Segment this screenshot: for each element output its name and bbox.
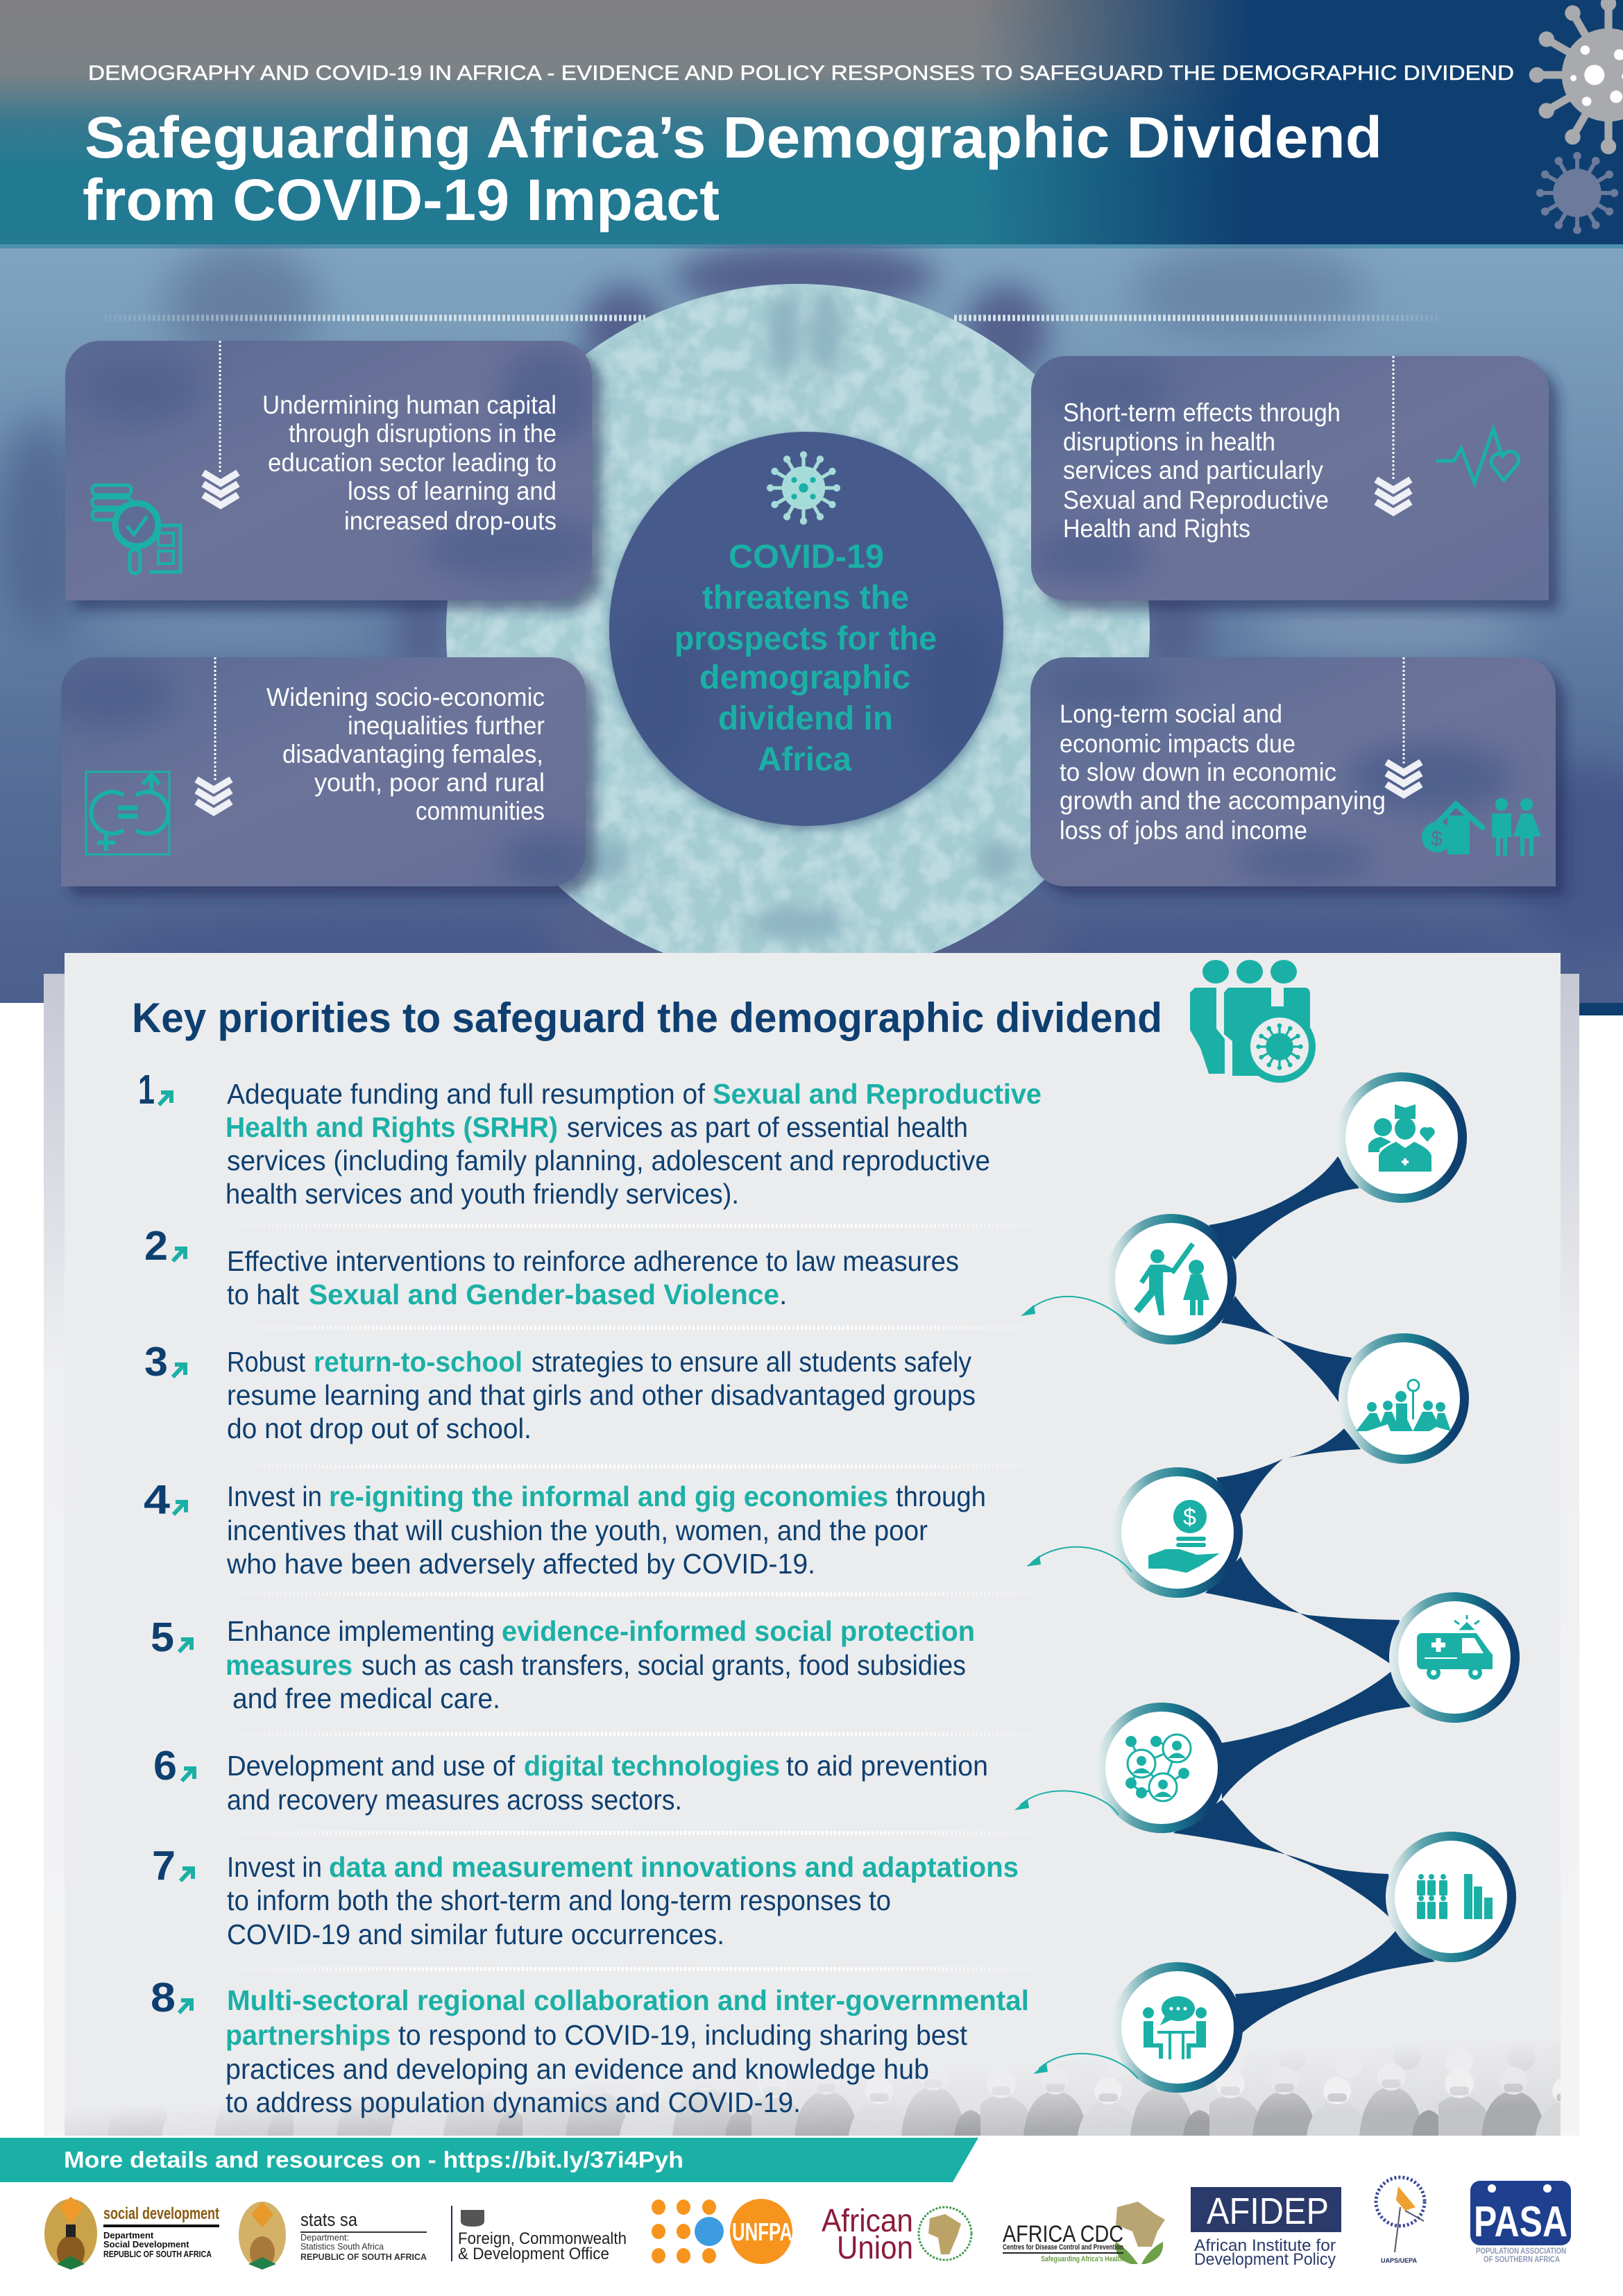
text: short-term effects: Health and Rights — [1063, 514, 1250, 543]
center statement: COVID-19 — [729, 539, 884, 575]
priority 8: to respond to COVID-19, including sharing best — [398, 2019, 968, 2051]
priority 3: return-to-school — [314, 1346, 522, 1378]
priority 2 — [144, 1223, 959, 1310]
logo: social development: REPUBLIC OF SOUTH AFRICA — [103, 2249, 212, 2259]
priority 5: Enhance implementing — [227, 1615, 495, 1647]
icon: people and virus — [1190, 960, 1316, 1083]
text: inequalities: youth, poor and rural — [314, 768, 545, 797]
text: human capital: loss of learning and — [348, 477, 556, 505]
icon: gender equality — [86, 772, 169, 854]
logo: stats sa: REPUBLIC OF SOUTH AFRICA — [300, 2252, 427, 2262]
node: health workers — [1336, 1072, 1467, 1203]
priority 6: Development and use of — [227, 1750, 516, 1782]
connector ribbon — [1173, 1156, 1435, 2033]
logo: PASA: OF SOUTHERN AFRICA — [1484, 2254, 1560, 2264]
priority 1: Health and Rights (SRHR) — [226, 1111, 558, 1143]
priority 1 — [138, 1067, 1042, 1210]
center statement — [674, 539, 937, 778]
icon: house, money and family: $ — [1431, 827, 1443, 850]
logo: FCDO: Foreign, Commonwealth — [458, 2229, 627, 2248]
heading: Key priorities to safeguard the demographic dividend — [132, 995, 1162, 1041]
main title: from COVID-19 Impact — [83, 167, 720, 233]
priority 8: 8 — [151, 1975, 176, 2020]
priority 5 — [151, 1614, 975, 1714]
text: short-term effects: Short-term effects through — [1063, 398, 1341, 427]
node: gender violence — [1106, 1214, 1237, 1344]
text: human capital: Undermining human capital — [262, 391, 556, 419]
panel backing sheet — [44, 974, 1579, 2136]
header subtitle: DEMOGRAPHY AND COVID-19 IN AFRICA - EVIDENCE AND POLICY RESPONSES TO SAFEGUARD THE DEMOGRAPHIC DIVIDEND — [88, 62, 1514, 85]
node: cash in hand: $ — [1183, 1504, 1196, 1530]
dark virus silhouette around the circle — [397, 243, 1207, 979]
node: digital network — [1096, 1703, 1227, 1833]
text: human capital: through disruptions in the — [289, 419, 556, 448]
priority 7 — [152, 1843, 1019, 1950]
priority 3: do not drop out of school. — [227, 1412, 532, 1444]
node: ambulance — [1389, 1592, 1520, 1723]
priority 2: Sexual and Gender-based Violence — [309, 1278, 779, 1310]
text: long-term impacts: growth and the accompanying — [1060, 786, 1386, 815]
logo: Africa CDC: Safeguarding Africa’s Health — [1041, 2255, 1123, 2263]
center statement: demographic — [699, 659, 910, 696]
priority 1: Sexual and Reproductive — [713, 1078, 1042, 1110]
panel: key priorities — [65, 953, 1561, 2136]
dotted rule — [104, 315, 1440, 321]
priority 3 — [144, 1339, 976, 1444]
panel: long-term impacts — [1030, 657, 1556, 886]
priority 2: . — [779, 1278, 787, 1310]
separators — [201, 1226, 1062, 1969]
logo: Africa CDC: AFRICA CDC — [1003, 2221, 1123, 2247]
priority 4: 4 — [144, 1477, 170, 1523]
text: inequalities — [266, 683, 545, 825]
navy corner strip — [1579, 1003, 1623, 1015]
priority 6: and recovery measures across sectors. — [227, 1784, 682, 1816]
center statement: prospects for the — [674, 621, 937, 657]
priority 2: Effective interventions to reinforce adherence to law measures — [227, 1245, 959, 1277]
text: inequalities: communities — [416, 797, 545, 825]
priority 1: Adequate funding and full resumption of — [227, 1078, 706, 1110]
arrow: node 2 — [1021, 1297, 1127, 1322]
header band — [0, 0, 1623, 244]
logo: AFIDEP: AFIDEP — [1207, 2191, 1329, 2232]
arrow: node 4 — [1026, 1547, 1132, 1572]
logo: African Union: Union — [837, 2229, 913, 2265]
text: inequalities: Widening socio-economic — [266, 683, 545, 711]
hero background — [0, 243, 1623, 1003]
priority 4: Invest in — [227, 1480, 322, 1512]
priority 6 — [153, 1743, 988, 1816]
main title — [83, 105, 1382, 233]
priority 2: 2 — [144, 1223, 168, 1269]
text: short-term effects: Sexual and Reproductive — [1063, 486, 1329, 514]
logo: Africa CDC — [1003, 2202, 1165, 2264]
priority 4 — [144, 1477, 986, 1580]
priority 3: 3 — [144, 1339, 168, 1385]
icon: books and magnifier — [92, 485, 180, 573]
priority 7: Invest in — [227, 1851, 322, 1883]
priority 3: strategies to ensure all students safely — [532, 1346, 971, 1378]
priority 7: to inform both the short-term and long-term responses to — [227, 1884, 891, 1916]
logo: social development: Department — [103, 2230, 154, 2240]
priority 2: to halt — [227, 1278, 300, 1310]
logo: stats sa — [239, 2202, 427, 2270]
icon: large virus — [1529, 0, 1623, 154]
text: short-term effects — [1063, 398, 1341, 543]
big pale circle — [446, 284, 1150, 979]
logo: social development: social development — [103, 2204, 219, 2223]
logo: African Union — [822, 2202, 971, 2265]
text: long-term impacts — [1060, 700, 1386, 845]
priority 3: resume learning and that girls and other disadvantaged groups — [227, 1379, 976, 1411]
priority 8: partnerships — [226, 2019, 391, 2051]
logo: AFIDEP: Development Policy — [1194, 2250, 1336, 2269]
text: human capital — [262, 391, 556, 535]
logo: stats sa: stats sa — [300, 2209, 358, 2230]
center statement: dividend in — [718, 700, 893, 737]
text: inequalities: inequalities further — [348, 711, 545, 740]
logo: social development — [44, 2197, 219, 2270]
priority 5: measures — [226, 1649, 352, 1681]
center circle — [609, 432, 1003, 826]
node: regional collaboration — [1112, 1962, 1243, 2093]
panel: inequalities — [49, 657, 597, 888]
main title: Safeguarding Africa’s Demographic Dividend — [85, 105, 1382, 170]
text: short-term effects: services and particularly — [1063, 456, 1323, 484]
priority 4: who have been adversely affected by COVID-19. — [226, 1548, 815, 1580]
text: long-term impacts: to slow down in economic — [1060, 758, 1336, 786]
logo: PASA: POPULATION ASSOCIATION — [1476, 2246, 1566, 2256]
priority 1: health services and youth friendly services). — [226, 1178, 739, 1210]
logo: stats sa: Statistics South Africa — [300, 2241, 384, 2252]
center statement: threatens the — [702, 580, 909, 616]
node: data and measurement — [1386, 1832, 1516, 1962]
priority 5: and free medical care. — [232, 1682, 500, 1714]
logo: PASA: PASA — [1474, 2198, 1567, 2246]
icon: house, money and family — [1422, 798, 1541, 856]
priority 6: digital technologies — [524, 1750, 780, 1782]
logo: social development: Social Development — [103, 2239, 189, 2249]
text: human capital: education sector leading to — [268, 448, 556, 477]
priority 4: incentives that will cushion the youth, women, and the poor — [227, 1514, 928, 1546]
text: human capital: increased drop-outs — [344, 507, 556, 535]
priority 8 — [151, 1975, 1029, 2118]
panel: human capital — [65, 341, 604, 600]
logo: PASA — [1470, 2181, 1571, 2264]
priority 7: data and measurement innovations and adaptations — [329, 1851, 1019, 1883]
arrow: node 8 — [1033, 2054, 1138, 2079]
logo: stats sa: Department: — [300, 2232, 349, 2243]
text: long-term impacts: economic impacts due — [1060, 729, 1295, 758]
priority 5: evidence-informed social protection — [502, 1615, 975, 1647]
priority 8: to address population dynamics and COVID-19. — [226, 2086, 801, 2118]
priority 4: through — [896, 1480, 986, 1512]
node: cash in hand — [1112, 1467, 1243, 1598]
priority 8: practices and developing an evidence and knowledge hub — [226, 2053, 929, 2085]
text: long-term impacts: loss of jobs and income — [1060, 816, 1307, 845]
icon: virus — [767, 451, 840, 525]
priority 7: COVID-19 and similar future occurrences. — [227, 1918, 724, 1950]
priority 4: re-igniting the informal and gig economies — [329, 1480, 888, 1512]
priority 3: Robust — [227, 1346, 306, 1378]
crowd illustration — [65, 2052, 1561, 2136]
icon: heartbeat — [1436, 429, 1519, 483]
priority 6: 6 — [153, 1743, 177, 1789]
footer bar: More details and resources on - https://bit.ly/37i4Pyh — [64, 2147, 683, 2172]
arrow: node 6 — [1014, 1791, 1119, 1815]
priority 6: to aid prevention — [786, 1750, 988, 1782]
text: short-term effects: disruptions in health — [1063, 428, 1275, 456]
logo: AFIDEP: African Institute for — [1194, 2236, 1336, 2255]
center statement: Africa — [758, 741, 851, 778]
logo: UNFPA — [652, 2199, 792, 2264]
text: long-term impacts: Long-term social and — [1060, 700, 1282, 728]
text: inequalities: disadvantaging females, — [282, 740, 543, 768]
panel: short-term effects — [1027, 356, 1549, 600]
priority 5: 5 — [151, 1614, 174, 1660]
logo: UAPS: UAPS/UEPA — [1381, 2257, 1418, 2264]
logo: AFIDEP — [1191, 2187, 1341, 2269]
logo: FCDO — [451, 2206, 627, 2263]
logo: UAPS — [1376, 2177, 1425, 2264]
logo: UNFPA: UNFPA — [732, 2218, 792, 2246]
logo: Africa CDC: Centres for Disease Control and Prevention — [1003, 2243, 1123, 2252]
priority 8: Multi-sectoral regional collaboration and inter-governmental — [227, 1984, 1029, 2016]
node: return to school — [1339, 1333, 1469, 1464]
priority 1: services (including family planning, adolescent and reproductive — [227, 1145, 990, 1176]
priority 1: 1 — [138, 1067, 155, 1113]
logo: African Union: African — [822, 2202, 913, 2238]
priority 1: services as part of essential health — [567, 1111, 968, 1143]
logo: FCDO: & Development Office — [458, 2245, 609, 2263]
priority 7: 7 — [152, 1843, 176, 1889]
priority 5: such as cash transfers, social grants, food subsidies — [362, 1649, 966, 1681]
footer bar — [0, 2138, 978, 2182]
icon: small virus — [1536, 152, 1618, 234]
